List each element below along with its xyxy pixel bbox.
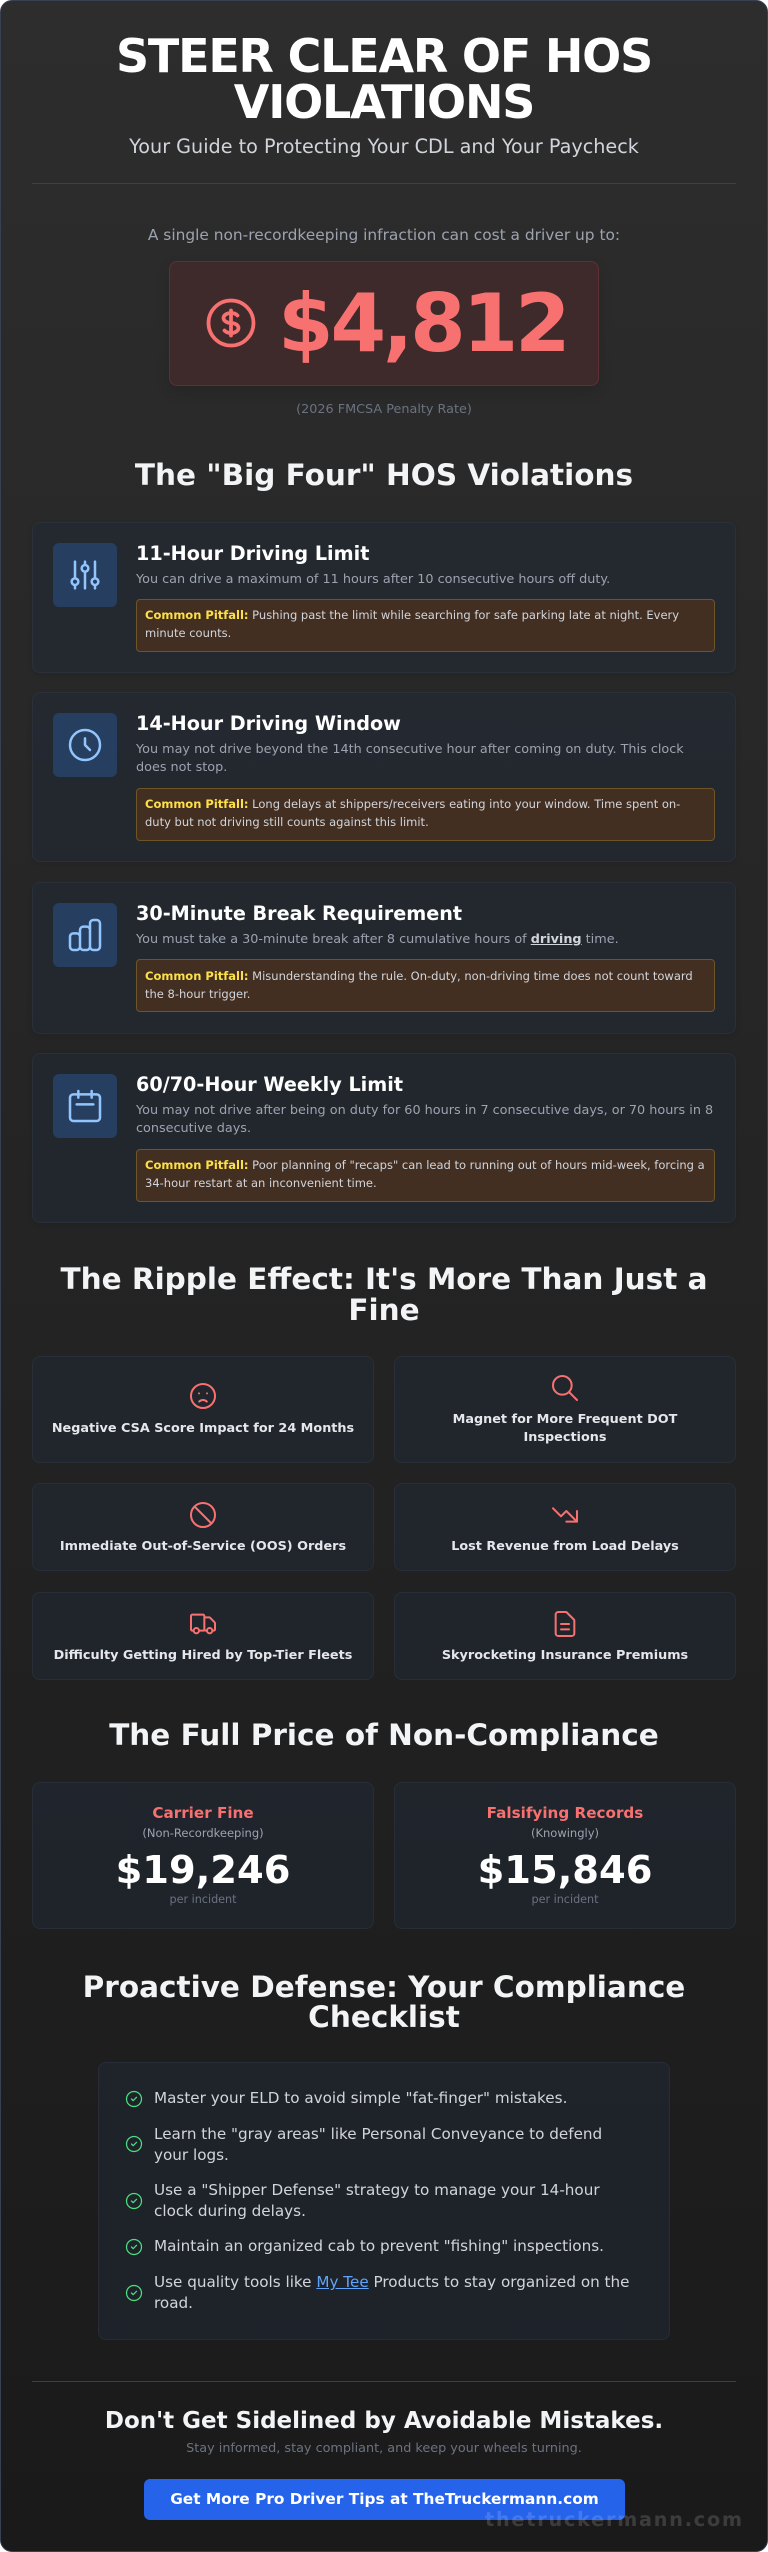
card description [136, 1103, 713, 1136]
icon: sad face [190, 1383, 216, 1409]
panel: insurance [394, 1592, 736, 1680]
icon: magnifier [552, 1375, 578, 1401]
card description: You can drive a maximum of 11 hours after 10 consecutive hours off duty. [136, 572, 610, 587]
card title: 60/70-Hour Weekly Limit [136, 1073, 403, 1096]
checklist item 3: Use a "Shipper Defense" strategy to manage your 14-hour [154, 2181, 600, 2199]
common pitfall: Common Pitfall: Poor planning of "recaps" can lead to running out of hours mid-week, forcing a [145, 1158, 705, 1172]
watermark: thetruckermann.com [485, 2508, 744, 2531]
icon: calendar [53, 1074, 117, 1138]
icon: dollar circle [206, 298, 256, 348]
title: STEER CLEAR OF HOS [116, 29, 652, 83]
checklist item 5 [154, 2273, 629, 2312]
card description: You may not drive beyond the 14th consecutive hour after coming on duty. This clock [136, 742, 684, 757]
call to action subtext: Stay informed, stay compliant, and keep your wheels turning. [186, 2441, 582, 2456]
check icon 1 [126, 2090, 142, 2108]
label [453, 1412, 678, 1445]
checklist item 5: road. [154, 2294, 193, 2312]
panel: carrier fine [32, 1782, 374, 1929]
title [116, 29, 652, 129]
penalty intro text: A single non-recordkeeping infraction can cost a driver up to: [148, 226, 620, 244]
card description: consecutive days. [136, 1121, 251, 1136]
fine qualifier: (Non-Recordkeeping) [142, 1826, 264, 1840]
panel: out of service [32, 1483, 374, 1571]
label: Magnet for More Frequent DOT [453, 1412, 677, 1427]
icon: sliders [53, 542, 117, 606]
label: Inspections [524, 1430, 606, 1445]
heading: ripple effect [60, 1262, 708, 1327]
common pitfall [136, 1148, 715, 1202]
label: Skyrocketing Insurance Premiums [442, 1648, 688, 1663]
panel: falsifying records [394, 1782, 736, 1929]
heading: proactive defense: Checklist [308, 2000, 460, 2034]
heading: big four: The "Big Four" HOS Violations [135, 458, 633, 492]
icon: ban [190, 1502, 216, 1528]
panel: CSA score [32, 1356, 374, 1463]
call to action button [144, 2479, 625, 2520]
common pitfall: Common Pitfall: Long delays at shippers/receivers eating into your window. Time spent on- [145, 797, 680, 811]
check icon 4 [126, 2238, 142, 2256]
checklist item 4: Maintain an organized cab to prevent "fishing" inspections. [154, 2237, 604, 2255]
check icon 3 [126, 2192, 142, 2210]
common pitfall: minute counts. [145, 626, 231, 640]
card: 11-hour limit [32, 522, 736, 673]
check icon 2 [126, 2136, 142, 2152]
panel: DOT inspections [394, 1356, 736, 1463]
icon: bar chart [53, 902, 117, 966]
fine amount: $19,246 [116, 1848, 290, 1893]
icon: trending down [552, 1507, 578, 1523]
heading: proactive defense: Proactive Defense: Your Compliance [83, 1970, 685, 2004]
label: Lost Revenue from Load Delays [451, 1539, 679, 1554]
panel: lost revenue [394, 1483, 736, 1571]
penalty note: (2026 FMCSA Penalty Rate) [296, 402, 472, 417]
card title: 30-Minute Break Requirement [136, 902, 462, 925]
card: 60/70-hour limit [32, 1053, 736, 1223]
fine amount: $15,846 [478, 1848, 652, 1893]
per incident: per incident [531, 1893, 599, 1906]
checklist item 1: Master your ELD to avoid simple "fat-finger" mistakes. [154, 2089, 567, 2107]
call to action button: Get More Pro Driver Tips at TheTruckermann.com [170, 2490, 599, 2508]
check icon 5 [126, 2284, 142, 2302]
title: VIOLATIONS [234, 75, 534, 129]
card title: 11-Hour Driving Limit [136, 542, 369, 565]
common pitfall [136, 788, 715, 840]
checklist item 2: Learn the "gray areas" like Personal Conveyance to defend [154, 2125, 602, 2143]
card title: 14-Hour Driving Window [136, 712, 401, 735]
heading: ripple effect: The Ripple Effect: It's More Than Just a [60, 1262, 708, 1296]
card description: does not stop. [136, 760, 227, 775]
common pitfall: duty but not driving still counts against this limit. [145, 815, 429, 829]
common pitfall [136, 598, 715, 652]
icon: clock [53, 712, 117, 776]
common pitfall: 34-hour restart at an inconvenient time. [145, 1176, 377, 1190]
fine name: Carrier Fine [152, 1804, 254, 1822]
checklist item 3: clock during delays. [154, 2202, 306, 2220]
icon: truck [190, 1614, 216, 1634]
common pitfall: Common Pitfall: Pushing past the limit while searching for safe parking late at night. Every [145, 608, 679, 622]
heading: ripple effect: Fine [348, 1293, 420, 1327]
panel: compliance checklist [98, 2062, 670, 2340]
penalty amount box [169, 261, 599, 386]
card description [136, 742, 684, 775]
common pitfall: the 8-hour trigger. [145, 986, 250, 1000]
fine qualifier: (Knowingly) [531, 1826, 599, 1840]
label: Difficulty Getting Hired by Top-Tier Fleets [54, 1648, 352, 1663]
checklist item 3 [154, 2181, 600, 2220]
card description: You must take a 30-minute break after 8 cumulative hours of driving time. [136, 932, 619, 947]
fine name: Falsifying Records [487, 1804, 643, 1822]
panel: hiring [32, 1592, 374, 1680]
common pitfall: Common Pitfall: Misunderstanding the rule. On-duty, non-driving time does not count toward [145, 968, 693, 982]
checklist item 2 [154, 2125, 602, 2164]
penalty amount: $4,812 [278, 277, 568, 370]
call to action heading: Don't Get Sidelined by Avoidable Mistakes. [105, 2408, 663, 2434]
heading: proactive defense [83, 1970, 685, 2034]
label: Negative CSA Score Impact for 24 Months [52, 1421, 354, 1436]
card: 30-minute break [32, 882, 736, 1034]
checklist item 5: Use quality tools like My Tee Products to stay organized on the [154, 2273, 629, 2291]
checklist item 2: your logs. [154, 2146, 229, 2164]
card: 14-hour window [32, 692, 736, 862]
card description: You may not drive after being on duty for 60 hours in 7 consecutive days, or 70 hours in 8 [136, 1103, 713, 1118]
subtitle: Your Guide to Protecting Your CDL and Your Paycheck [129, 135, 639, 158]
common pitfall [136, 959, 715, 1012]
label: Immediate Out-of-Service (OOS) Orders [60, 1539, 346, 1554]
per incident: per incident [169, 1893, 237, 1906]
heading: full price: The Full Price of Non-Compliance [109, 1718, 659, 1752]
icon: document [554, 1611, 576, 1637]
